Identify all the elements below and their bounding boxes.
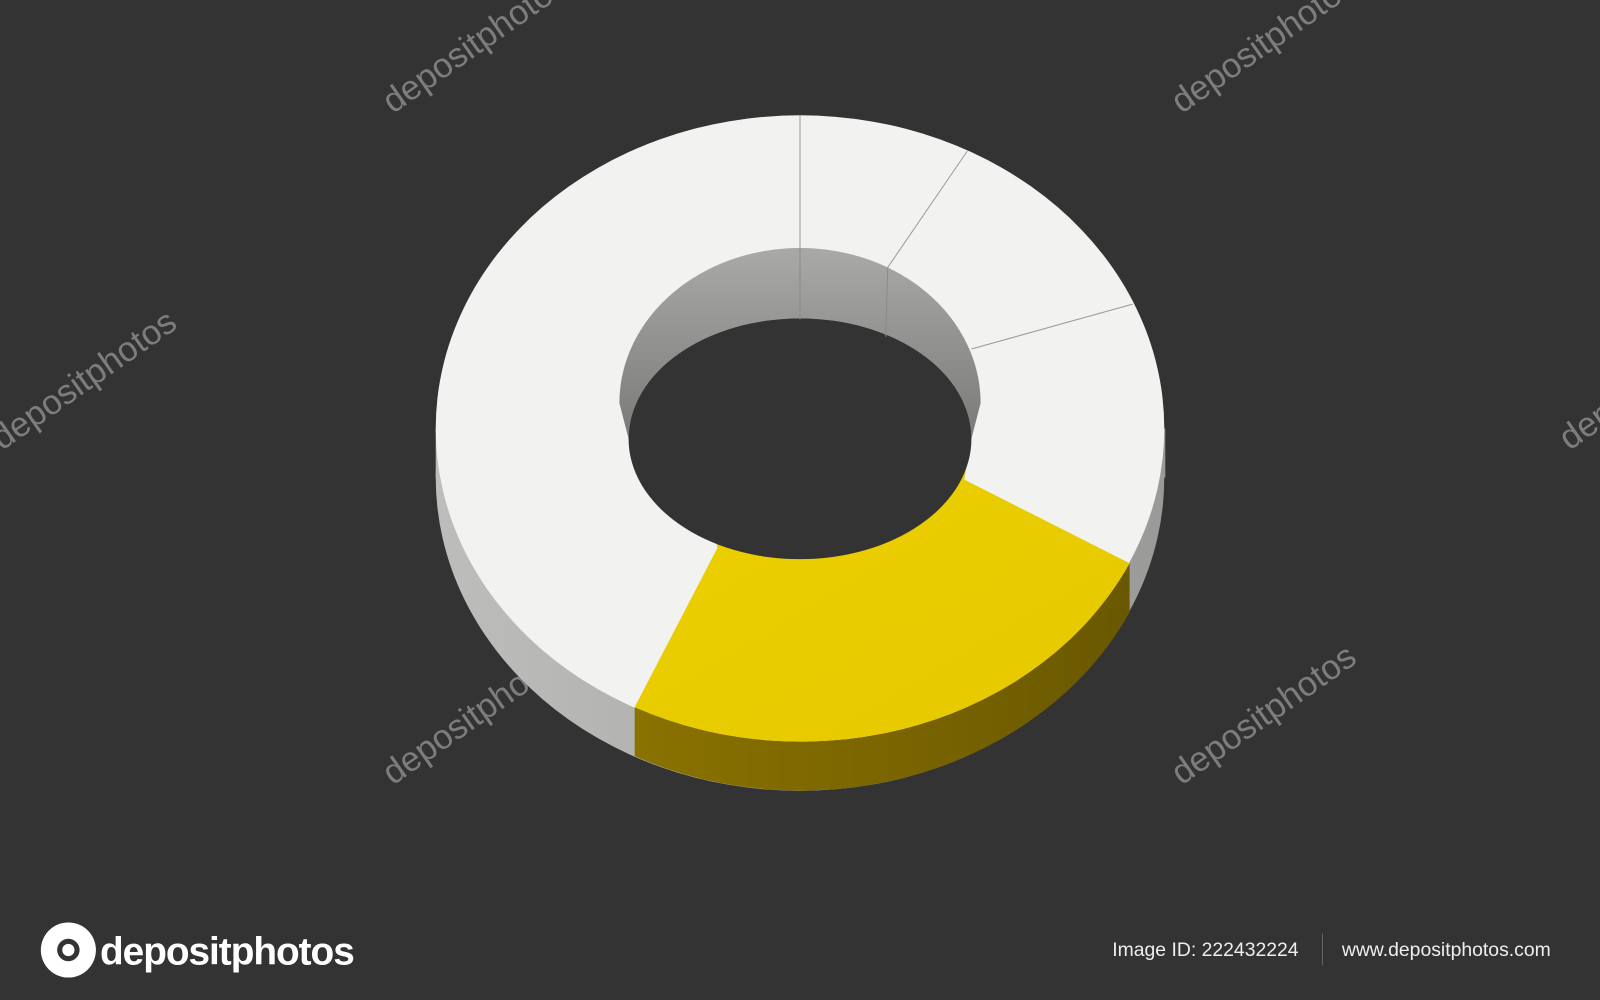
chart: donut [436, 115, 1165, 791]
yellow segment top [635, 449, 1130, 742]
segment dividers [800, 115, 1133, 349]
watermarks: depositphotos [1164, 637, 1363, 792]
donut side band [436, 164, 1165, 791]
footer image id: Image ID: 222432224 [1112, 939, 1299, 961]
footer logo [41, 922, 354, 978]
footer logo: depositphotos [100, 930, 354, 973]
watermarks: depositphotos [771, 303, 969, 458]
footer image id: www.depositphotos.com [1341, 939, 1551, 961]
yellow segment side [635, 563, 1130, 791]
footer image id [1112, 934, 1551, 965]
donut top face [436, 115, 1164, 742]
watermarks: depositphotos [376, 637, 574, 792]
donut hole [619, 248, 981, 559]
watermarks [0, 0, 1600, 792]
